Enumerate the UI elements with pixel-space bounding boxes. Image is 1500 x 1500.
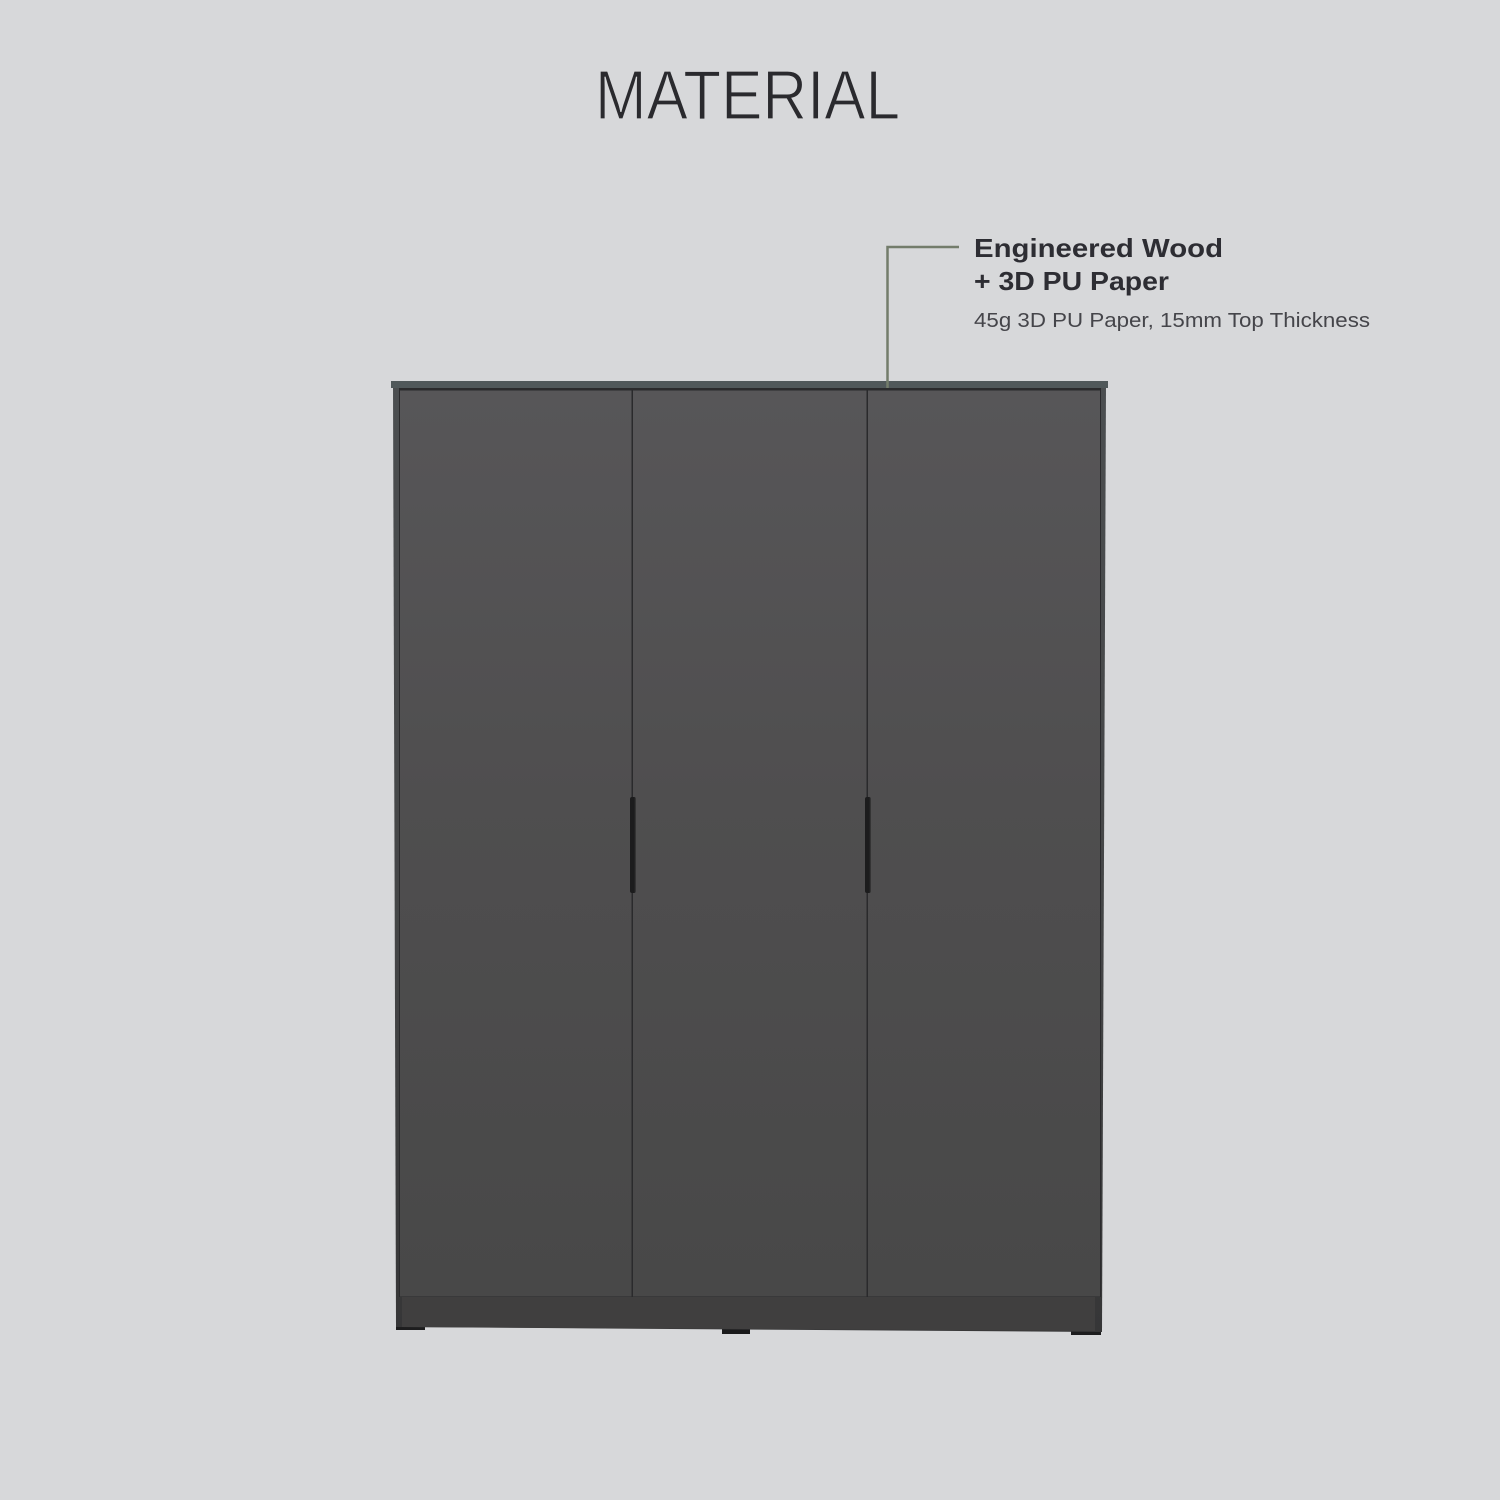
centre door: [633, 390, 866, 1296]
title: MATERIAL: [595, 56, 900, 134]
callout leader line: [888, 247, 959, 388]
callout heading: [974, 233, 1223, 296]
callout heading: Engineered Wood: [974, 233, 1223, 263]
wardrobe: [391, 381, 1108, 1335]
callout heading: + 3D PU Paper: [974, 266, 1169, 296]
plinth: [402, 1297, 1095, 1331]
door recess shadow: [399, 388, 1101, 1297]
callout detail: 45g 3D PU Paper, 15mm Top Thickness: [974, 310, 1370, 332]
left door: [400, 390, 632, 1296]
callout text: [974, 233, 1370, 332]
right handle: [865, 797, 871, 893]
wardrobe feet: [396, 1322, 1101, 1335]
right door: [868, 390, 1100, 1296]
left handle: [630, 797, 636, 893]
wardrobe carcass: [393, 385, 1106, 1332]
top panel: [391, 381, 1108, 388]
